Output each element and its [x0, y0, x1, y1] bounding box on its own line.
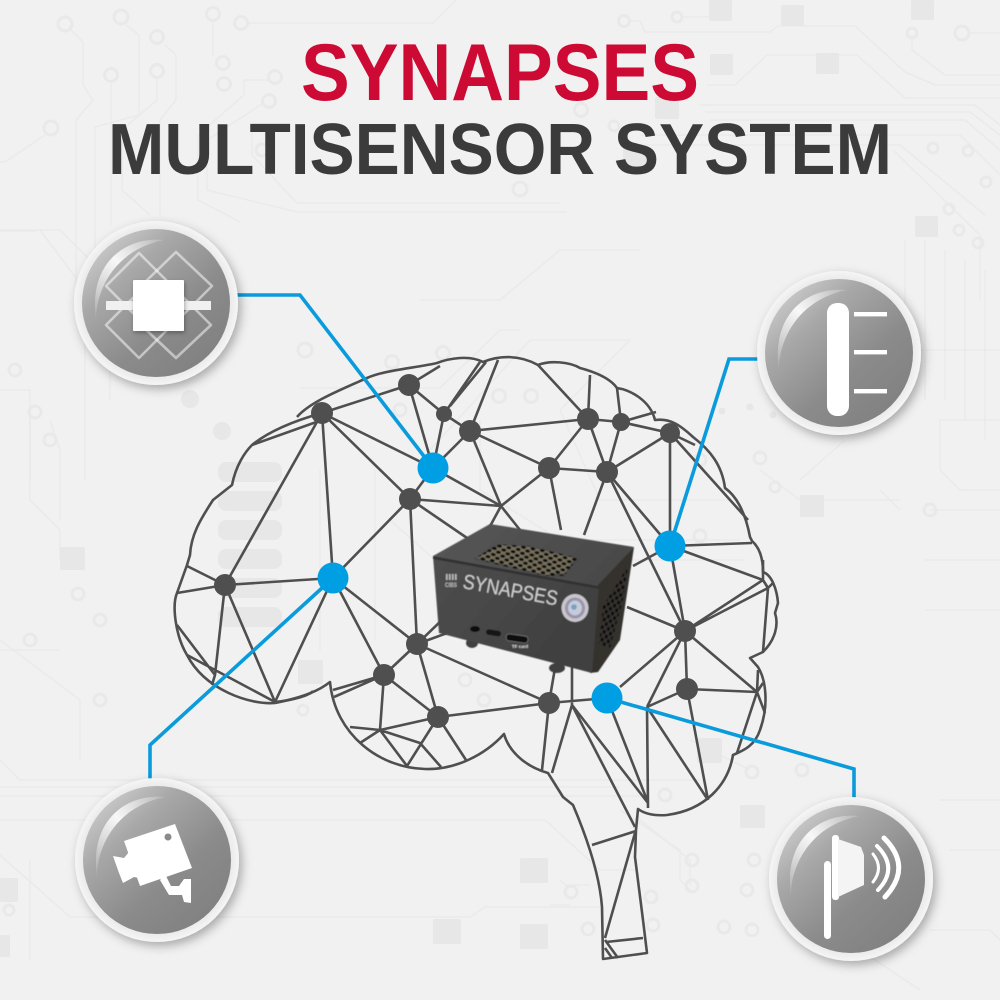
network edges: [177, 360, 773, 958]
blue nodes: [318, 452, 686, 714]
ports: TF card: [512, 644, 528, 649]
sensor badge: top-left lattice sensor: [74, 221, 238, 385]
icon: security camera: [113, 824, 192, 903]
icon: vertical bar with ticks: [827, 303, 887, 416]
cibs logo: [445, 574, 458, 589]
title line: MULTISENSOR SYSTEM: MULTISENSOR SYSTEM: [108, 110, 892, 190]
glossy highlight: [778, 290, 847, 369]
side vent: [599, 566, 628, 648]
blue connector: bottom-right sensor: [607, 698, 854, 800]
device right face: [590, 547, 634, 673]
icon: lattice with square chip: [106, 252, 212, 358]
sensor badge: top-right level sensor: [757, 271, 921, 435]
blue connector: top-right sensor: [670, 359, 762, 546]
blue connector: top-left sensor: [237, 295, 433, 468]
top vent: [474, 544, 578, 576]
sensor badge: bottom-right acoustic sensor: [769, 797, 933, 961]
title: [108, 28, 892, 190]
power button: [562, 594, 588, 622]
title line: SYNAPSES: SYNAPSES: [301, 28, 699, 118]
grey nodes: [214, 374, 698, 728]
device label: SYNAPSES: [461, 570, 560, 610]
device top face: [433, 524, 634, 586]
ports: [470, 626, 528, 649]
icon: speaker with sound waves: [824, 835, 899, 939]
brain outline with brainstem: [175, 357, 778, 959]
synapses hardware device: [433, 524, 634, 673]
sensor badge: bottom-left camera: [75, 778, 239, 942]
glossy highlight: [790, 816, 859, 895]
device feet: [466, 638, 565, 673]
glossy highlight: [95, 240, 164, 319]
blue connector: bottom-left sensor: [150, 578, 333, 780]
glossy highlight: [96, 797, 165, 876]
device front face: [433, 556, 599, 673]
brain network: [175, 357, 778, 959]
cibs logo: CIBS: [445, 582, 458, 589]
